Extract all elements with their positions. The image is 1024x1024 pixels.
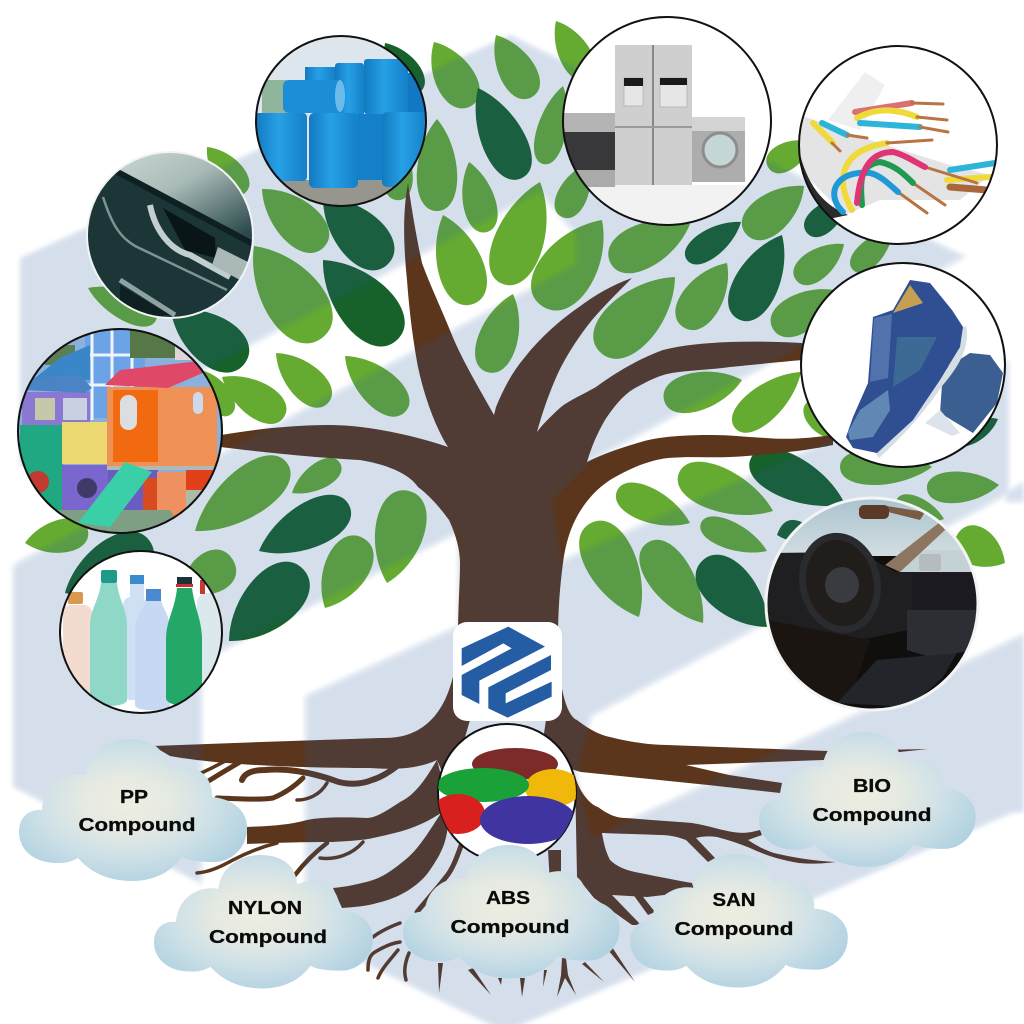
circle outline: plastic playhouse xyxy=(18,329,222,533)
photo: electrical cables xyxy=(800,72,995,243)
cloud: BIO Compound: Compound xyxy=(812,804,932,825)
cloud: SAN Compound xyxy=(630,854,848,987)
circle outline: blue shoes xyxy=(801,263,1005,467)
photo: car interior xyxy=(765,498,980,713)
tree trunk and branches xyxy=(221,183,833,640)
photo: colored plastic granules xyxy=(431,724,581,862)
cloud: ABS Compound: Compound xyxy=(450,916,570,937)
tree canopy: green leaves xyxy=(25,21,1005,623)
cloud: BIO Compound: BIO xyxy=(853,775,891,796)
cloud: NYLON Compound xyxy=(154,855,373,988)
tree canopy: dark leaves xyxy=(65,43,998,641)
logo badge xyxy=(453,622,562,721)
circle outline: plastic bottles xyxy=(60,551,222,713)
cloud: PP Compound xyxy=(19,739,247,881)
cloud: ABS Compound: ABS xyxy=(486,887,530,908)
cloud: SAN Compound: SAN xyxy=(712,889,756,910)
tree roots xyxy=(153,640,928,997)
photo: blue shoes xyxy=(801,263,1005,467)
cloud: PP Compound: Compound xyxy=(78,814,196,835)
circle outline: blue plastic drums xyxy=(256,36,426,206)
photo: home appliances xyxy=(564,45,764,224)
cloud: ABS Compound xyxy=(403,845,620,978)
photo: blue plastic drums xyxy=(255,35,427,210)
cloud: BIO Compound xyxy=(759,732,976,867)
circle outline: car interior xyxy=(766,498,978,710)
cloud: PP Compound: PP xyxy=(120,786,148,807)
photo: plastic bottles xyxy=(60,551,222,713)
circle outline: electrical cables xyxy=(799,46,997,244)
circle outline: car door handle xyxy=(87,152,253,318)
cloud: SAN Compound: Compound xyxy=(674,918,794,939)
cloud: NYLON Compound: Compound xyxy=(209,926,327,947)
photo: plastic playhouse xyxy=(15,325,225,537)
photo: car door handle xyxy=(85,150,255,320)
circle outline: home appliances xyxy=(563,17,771,225)
cloud: NYLON Compound: NYLON xyxy=(228,897,302,918)
